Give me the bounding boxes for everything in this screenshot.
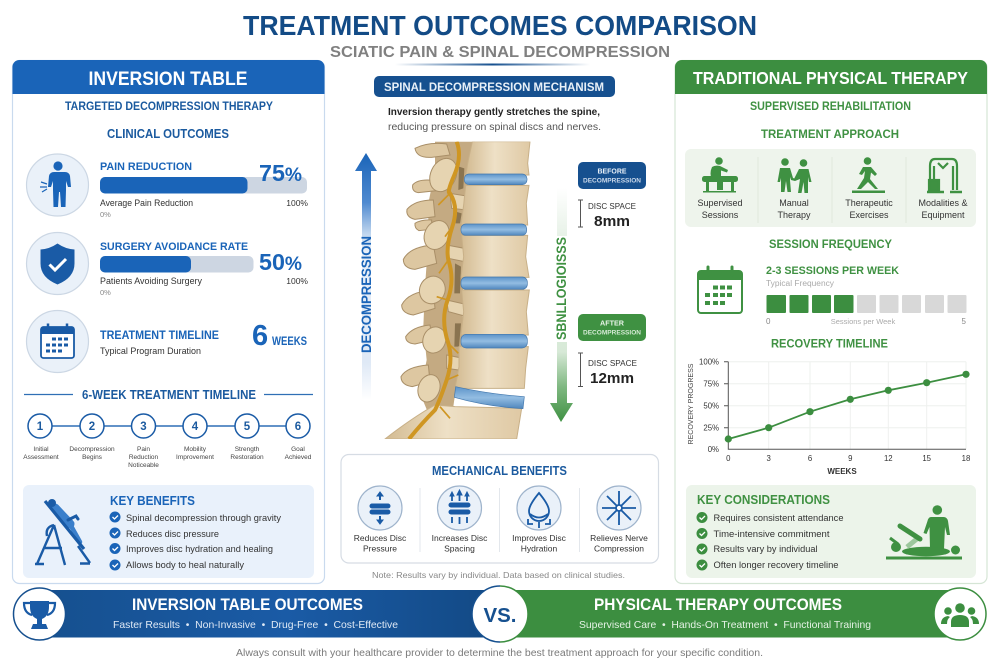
key benefits box: KEY BENEFITS bbox=[110, 494, 195, 508]
panel: mechanical benefits: Increases Disc bbox=[432, 533, 488, 543]
label: before decompression: BEFORE bbox=[598, 166, 626, 176]
icon: therapist with patient bbox=[886, 505, 962, 560]
6-week timeline: Assessment bbox=[23, 454, 59, 461]
measurement: 12mm: 12mm bbox=[590, 370, 634, 387]
treatment approach box: Therapy bbox=[777, 210, 811, 220]
6-week timeline: Restoration bbox=[230, 454, 264, 461]
metric: pain reduction: 100% bbox=[286, 198, 308, 208]
6-week timeline: Mobility bbox=[184, 446, 207, 453]
panel: mechanical benefits: MECHANICAL BENEFITS bbox=[432, 464, 567, 478]
line chart: recovery: 0 bbox=[726, 454, 731, 463]
6-week timeline: 5 bbox=[244, 421, 251, 433]
line chart: recovery: 25% bbox=[703, 424, 719, 432]
arrow: decompression up bbox=[355, 153, 377, 400]
label: after decompression: DECOMPRESSION bbox=[583, 330, 641, 336]
6-week timeline: Reduction bbox=[129, 454, 159, 461]
metric: surgery avoidance: Patients Avoiding Surgery bbox=[100, 276, 202, 286]
key considerations box: Results vary by individual bbox=[714, 544, 818, 554]
mechanism heading pill: SPINAL DECOMPRESSION MECHANISM bbox=[384, 82, 604, 94]
icon: inversion table bbox=[35, 499, 90, 565]
panel subtitle: TARGETED DECOMPRESSION THERAPY bbox=[65, 101, 273, 113]
measurement: 12mm: DISC SPACE bbox=[588, 359, 637, 368]
6-week timeline: Decompression bbox=[69, 446, 115, 453]
key benefits box bbox=[23, 485, 314, 578]
metric: treatment timeline bbox=[100, 320, 307, 357]
treatment approach box: Sessions bbox=[702, 210, 739, 220]
icon: shield bbox=[26, 232, 88, 294]
key considerations box: Time-intensive commitment bbox=[714, 529, 830, 539]
metric: pain reduction: 0% bbox=[100, 210, 111, 219]
line chart: recovery bbox=[686, 358, 970, 476]
footer disclaimer: Always consult with your healthcare provider to determine the best treatment approach for your specific condition. bbox=[236, 648, 763, 659]
line chart: recovery: 0% bbox=[708, 445, 719, 454]
key considerations box: Requires consistent attendance bbox=[714, 513, 844, 523]
icon: group of people bbox=[934, 588, 986, 640]
6-week timeline: 6 bbox=[295, 421, 301, 433]
line chart: recovery: 75% bbox=[703, 380, 719, 388]
metric: treatment timeline: WEEKS bbox=[272, 336, 307, 348]
panel header: inversion table bbox=[12, 60, 324, 94]
6-week timeline: 2 bbox=[89, 421, 95, 433]
6-week timeline: Noticeable bbox=[128, 462, 159, 469]
treatment approach box: Supervised bbox=[697, 198, 743, 208]
6-week timeline: 3 bbox=[140, 421, 147, 433]
icon: green calendar bbox=[698, 267, 742, 313]
metric: surgery avoidance bbox=[100, 241, 308, 297]
panel: mechanical benefits: Spacing bbox=[444, 544, 475, 554]
line chart: recovery: 3 bbox=[767, 454, 771, 463]
6-week timeline: Strength bbox=[235, 446, 260, 453]
6-week timeline: Initial bbox=[33, 446, 49, 453]
line chart: recovery: 6 bbox=[808, 454, 812, 463]
arrow: decompression up: DECOMPRESSION bbox=[359, 236, 374, 353]
panel header: inversion table: INVERSION TABLE bbox=[88, 69, 248, 90]
metric: pain reduction: 75% bbox=[259, 160, 302, 186]
heading: session frequency: SESSION FREQUENCY bbox=[769, 237, 892, 251]
line chart: recovery: 100% bbox=[699, 358, 719, 366]
banner: physical therapy outcomes: Supervised Care • Hands-On Treatment • Functional Training bbox=[579, 619, 871, 631]
mechanism description bbox=[388, 106, 601, 133]
key benefits box: Spinal decompression through gravity bbox=[126, 513, 281, 524]
6-week timeline bbox=[23, 388, 313, 469]
panel header: physical therapy bbox=[675, 60, 987, 94]
note: Note: Results vary by individual. Data based on clinical studies. bbox=[372, 570, 625, 580]
6-week timeline: 4 bbox=[192, 421, 199, 433]
key benefits box: Allows body to heal naturally bbox=[126, 560, 244, 571]
icon: equipment bbox=[927, 159, 962, 192]
mechanism description: reducing pressure on spinal discs and nerves. bbox=[388, 121, 601, 133]
line chart: recovery: 50% bbox=[703, 402, 719, 410]
metric: treatment timeline: TREATMENT TIMELINE bbox=[100, 330, 219, 342]
icon: hydration drop bbox=[528, 493, 550, 528]
6-week timeline: 1 bbox=[37, 421, 44, 433]
panel: mechanical benefits: Relieves Nerve bbox=[590, 533, 648, 543]
panel: mechanical benefits: Compression bbox=[594, 544, 644, 554]
measurement: 12mm bbox=[578, 353, 637, 387]
arrow: compression down: SBNLLOGIOISSS bbox=[554, 237, 569, 340]
session frequency meter: 5 bbox=[962, 317, 967, 326]
icon: therapeutic exercises bbox=[852, 157, 885, 193]
heading: treatment approach: TREATMENT APPROACH bbox=[761, 127, 899, 141]
treatment approach box: Equipment bbox=[921, 210, 965, 220]
session frequency meter: Typical Frequency bbox=[766, 279, 834, 288]
label: before decompression bbox=[578, 162, 646, 189]
treatment approach box: Manual bbox=[779, 198, 809, 208]
panel: traditional physical therapy bbox=[675, 60, 987, 584]
session frequency meter: Sessions per Week bbox=[831, 317, 895, 326]
posterior mass behind vertebrae bbox=[423, 142, 472, 410]
label: after decompression bbox=[578, 314, 646, 341]
icon: manual therapy bbox=[778, 158, 812, 193]
icon: trophy bbox=[14, 588, 66, 640]
6-week timeline: 6-WEEK TREATMENT TIMELINE bbox=[82, 388, 256, 402]
key benefits box: Reduces disc pressure bbox=[126, 529, 219, 540]
panel header: physical therapy: TRADITIONAL PHYSICAL THERAPY bbox=[693, 68, 968, 88]
metric: pain reduction: PAIN REDUCTION bbox=[100, 161, 192, 173]
icon: nerve relief bbox=[602, 491, 636, 525]
6-week timeline: Improvement bbox=[176, 454, 214, 461]
icon: increases spacing bbox=[449, 490, 470, 524]
panel: mechanical benefits: Improves Disc bbox=[512, 533, 567, 543]
metric: surgery avoidance: 100% bbox=[286, 276, 308, 286]
treatment approach box: Modalities & bbox=[918, 198, 968, 208]
banner: physical therapy outcomes: PHYSICAL THERAPY OUTCOMES bbox=[594, 596, 842, 614]
heading: recovery timeline: RECOVERY TIMELINE bbox=[771, 336, 888, 350]
6-week timeline: Achieved bbox=[285, 454, 312, 461]
panel subtitle: SUPERVISED REHABILITATION bbox=[750, 101, 911, 113]
label: after decompression: AFTER bbox=[600, 318, 625, 328]
metric: treatment timeline: 6 bbox=[252, 320, 268, 352]
panel: inversion table bbox=[12, 60, 324, 584]
line chart: recovery: 12 bbox=[884, 454, 893, 463]
icon: supervised sessions bbox=[702, 157, 738, 192]
subtitle: SCIATIC PAIN & SPINAL DECOMPRESSION bbox=[330, 44, 670, 61]
line chart: recovery: 18 bbox=[962, 454, 970, 463]
heading: clinical outcomes: CLINICAL OUTCOMES bbox=[107, 127, 229, 141]
treatment approach box bbox=[685, 149, 976, 227]
treatment approach box: Exercises bbox=[849, 210, 889, 220]
session frequency meter bbox=[766, 265, 967, 326]
line chart: recovery: WEEKS bbox=[827, 467, 857, 476]
line chart: recovery: 9 bbox=[848, 454, 852, 463]
mechanism description: Inversion therapy gently stretches the spine, bbox=[388, 106, 600, 118]
banner: inversion table outcomes: Faster Results • Non-Invasive • Drug-Free • Cost-Effective bbox=[113, 619, 398, 631]
key considerations box bbox=[686, 485, 976, 578]
icon: reduces pressure bbox=[370, 492, 390, 524]
key benefits box: Improves disc hydration and healing bbox=[126, 544, 273, 555]
panel: mechanical benefits: Reduces Disc bbox=[354, 533, 407, 543]
metric: pain reduction: Average Pain Reduction bbox=[100, 198, 193, 208]
panel: mechanical benefits: Pressure bbox=[363, 544, 397, 554]
line chart: recovery: 15 bbox=[922, 454, 932, 463]
panel: mechanical benefits bbox=[341, 454, 658, 563]
arrow: compression down bbox=[550, 188, 573, 422]
banner: physical therapy outcomes bbox=[515, 590, 950, 638]
key considerations box: Often longer recovery timeline bbox=[714, 560, 838, 570]
badge: vs: VS. bbox=[484, 604, 516, 627]
session frequency meter: 2-3 SESSIONS PER WEEK bbox=[766, 265, 899, 277]
6-week timeline: Begins bbox=[82, 454, 103, 461]
title: TREATMENT OUTCOMES COMPARISON bbox=[243, 10, 757, 41]
metric: treatment timeline: Typical Program Duration bbox=[100, 346, 201, 357]
label: before decompression: DECOMPRESSION bbox=[583, 178, 641, 184]
line chart: recovery: RECOVERY PROGRESS bbox=[686, 364, 695, 444]
treatment approach box: Therapeutic bbox=[845, 198, 893, 208]
banner: inversion table outcomes bbox=[45, 590, 485, 638]
badge: vs bbox=[472, 586, 528, 642]
icon: calendar bbox=[26, 310, 88, 372]
measurement: 8mm: 8mm bbox=[594, 214, 630, 230]
6-week timeline: Pain bbox=[137, 446, 150, 453]
illustration: spine bbox=[385, 142, 530, 439]
measurement: 8mm bbox=[578, 200, 636, 230]
panel: mechanical benefits: Hydration bbox=[521, 544, 557, 554]
mechanism heading pill bbox=[374, 76, 615, 97]
metric: pain reduction bbox=[100, 160, 308, 219]
banner: inversion table outcomes: INVERSION TABLE OUTCOMES bbox=[132, 596, 363, 614]
measurement: 8mm: DISC SPACE bbox=[588, 202, 636, 211]
6-week timeline: Goal bbox=[291, 446, 305, 453]
icon: person with back pain bbox=[26, 154, 88, 216]
metric: surgery avoidance: 50% bbox=[259, 249, 302, 275]
key considerations box: KEY CONSIDERATIONS bbox=[697, 493, 830, 507]
session frequency meter: 0 bbox=[766, 317, 771, 326]
metric: surgery avoidance: SURGERY AVOIDANCE RATE bbox=[100, 241, 248, 253]
metric: surgery avoidance: 0% bbox=[100, 288, 111, 297]
